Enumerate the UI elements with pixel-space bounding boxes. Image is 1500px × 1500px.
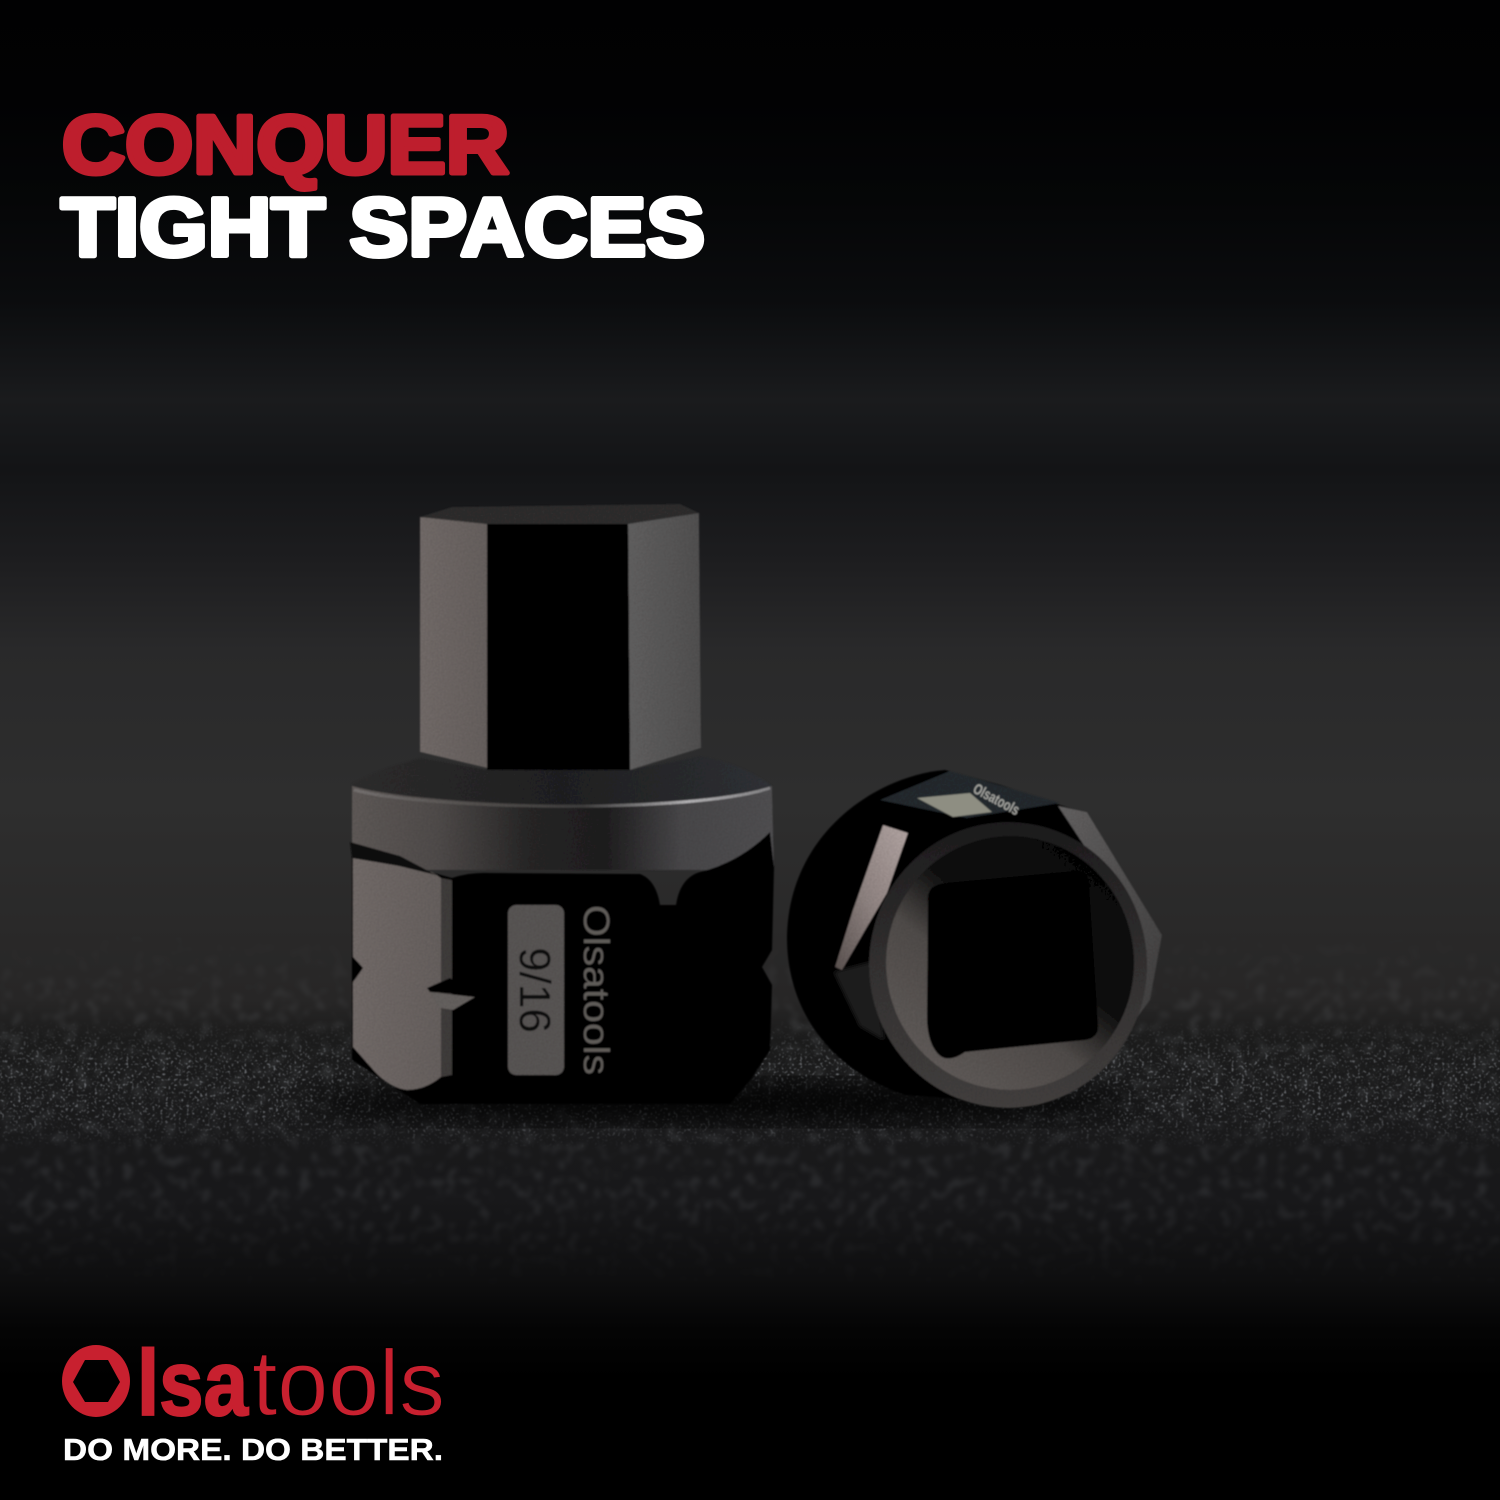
hex drive: top section <box>420 504 701 770</box>
lower left lit face <box>353 858 452 1090</box>
hex drive: dark centre face <box>487 524 630 770</box>
front ring <box>869 822 1147 1108</box>
logo block <box>62 1331 445 1467</box>
side notch lit wedge <box>430 992 475 1010</box>
square drive opening <box>927 871 1098 1059</box>
lower side facet <box>834 962 884 1040</box>
engraved brand mark: Olsatools <box>576 905 617 1075</box>
title line: conquer: CONQUER <box>62 98 509 191</box>
background: dark studio backdrop with textured floor <box>0 215 1500 1312</box>
logo: hexagon O mark <box>62 1345 130 1417</box>
tagline: DO MORE. DO BETTER. <box>63 1432 443 1467</box>
top flat <box>880 771 1060 818</box>
size plate <box>508 905 564 1075</box>
side notch dark wedge <box>427 978 473 995</box>
socket lower body <box>352 832 774 1104</box>
contact shadow beneath sockets <box>300 1080 1140 1124</box>
logo: wordmark light part: tools <box>252 1331 445 1435</box>
tipped socket <box>787 770 1162 1108</box>
right hex facet <box>1058 806 1162 1030</box>
highlighted facet <box>835 825 908 970</box>
collar shadow groove <box>350 842 436 875</box>
socket collar <box>352 756 774 870</box>
title <box>61 98 705 274</box>
upright socket <box>350 504 774 1104</box>
brand mark on flat: Olsatools <box>970 781 1022 819</box>
size label 9/16: 9/16 <box>510 947 559 1033</box>
inner recess <box>886 836 1134 1090</box>
title line: tight spaces: TIGHT SPACES <box>61 180 705 274</box>
size plate on flat <box>917 793 992 817</box>
logo: wordmark bold part: lsa <box>137 1331 249 1435</box>
socket shell <box>787 770 1150 1105</box>
